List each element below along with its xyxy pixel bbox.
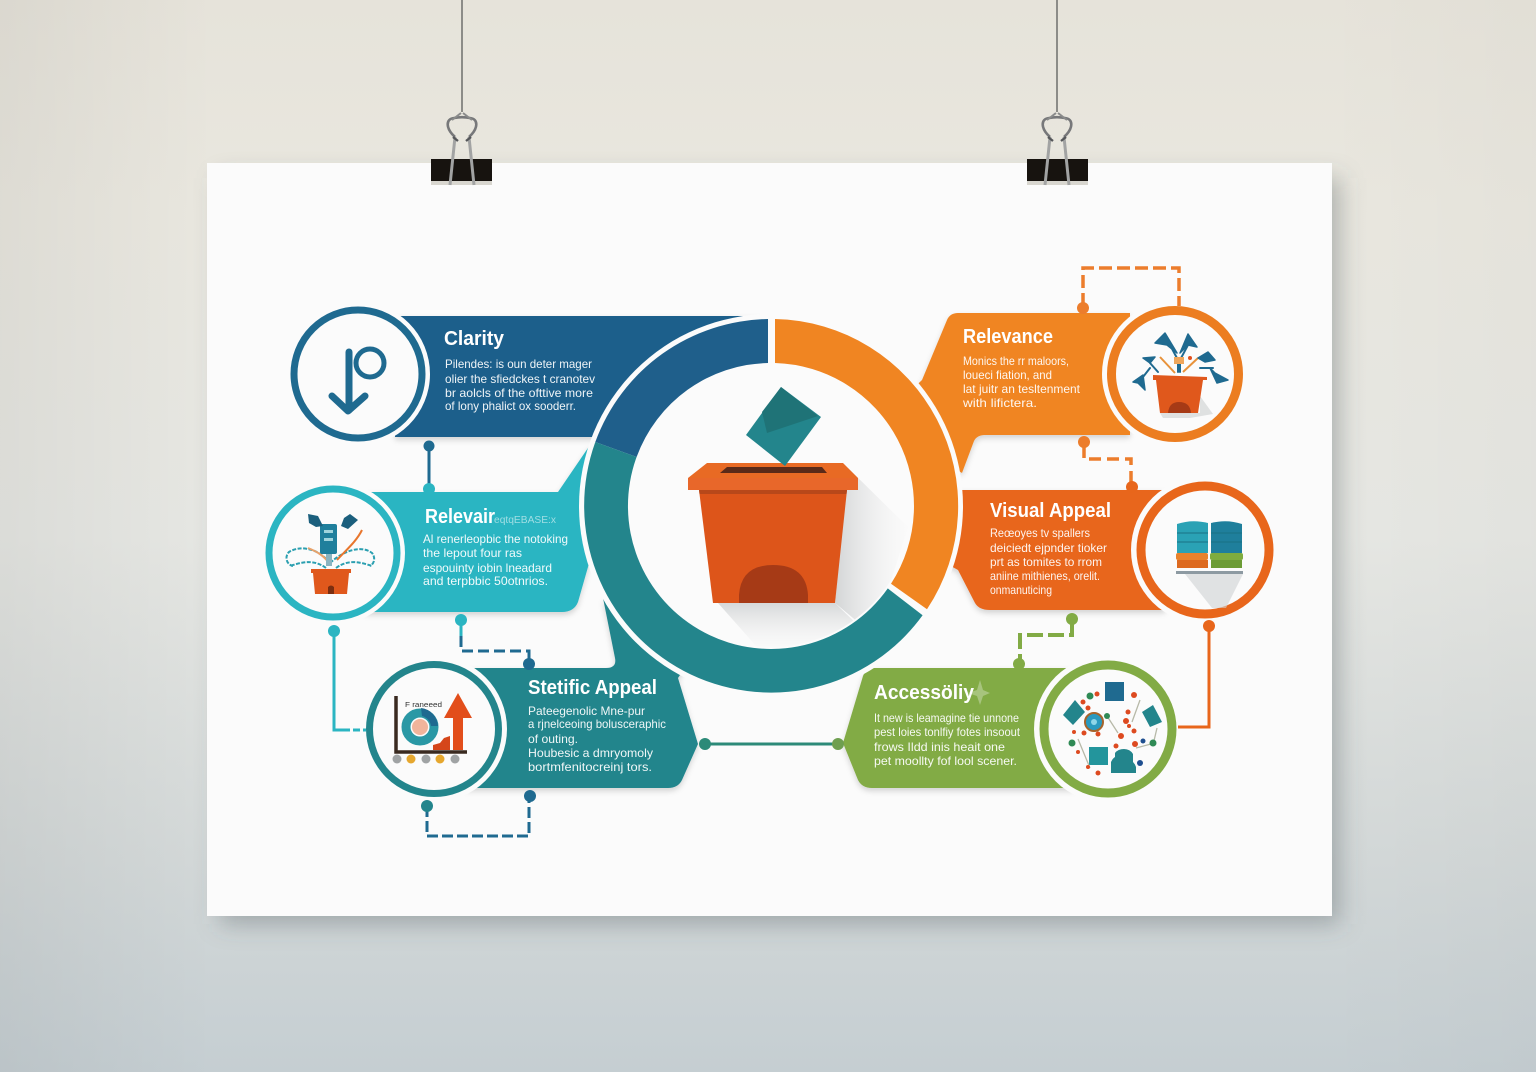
connector: relevance top dashed (1077, 268, 1179, 314)
ring segment: teal (584, 442, 923, 693)
clarity body text: of lony phalict ox sooderr. (445, 399, 576, 413)
relevance body text: lat juitr an tesltenment (963, 382, 1081, 396)
icon: arrow and ring (332, 349, 384, 411)
ballot paper (746, 387, 821, 466)
clarity body text (445, 357, 595, 413)
statistic badge (361, 656, 507, 802)
hanging clip left (431, 0, 492, 185)
panel: relevair (261, 445, 640, 625)
poster sheet (207, 163, 1332, 916)
statistic banner (465, 598, 698, 788)
accessibility body text: pest loies tonlfiy fotes insoout (874, 725, 1021, 739)
statistic body text: Houbesic a dmryomoly (528, 746, 653, 760)
icon: chart and arrow: F raneeed (405, 702, 442, 709)
connector: relevair to chart (328, 625, 366, 730)
visual appeal banner (940, 490, 1165, 610)
visual appeal badge (1131, 476, 1279, 624)
relevance body text: Monics the rr maloors, (963, 354, 1069, 368)
statistic body text: bortmfenitocreinj tors. (528, 760, 652, 774)
connector: visual to accessibility solid (1178, 620, 1215, 727)
donut ring (584, 319, 958, 693)
relevance body text: loueci fiation, and (963, 368, 1052, 382)
ring segment: blue (595, 319, 768, 457)
connector: chart bottom dashed loop (421, 790, 536, 836)
clarity body text: br aolcls of the ofttive more (445, 386, 593, 400)
central ballot box (688, 387, 882, 632)
relevair garbled subheading: eqtqEBASE:x (494, 515, 556, 526)
relevance heading: Relevance (963, 326, 1053, 348)
statistic body text (528, 704, 666, 774)
accessibility heading: Accessöliy (874, 682, 975, 704)
ring segment: orange (775, 319, 958, 609)
panel: clarity (286, 302, 760, 446)
connector: relevair to statistic dashed (455, 614, 535, 670)
clarity badge (286, 302, 430, 446)
box lid (688, 463, 858, 490)
icon: network of shapes (1063, 682, 1162, 776)
box long shadow right (835, 478, 882, 620)
accessibility body text (874, 711, 1021, 768)
connector: relevance to visual dashed (1078, 436, 1138, 493)
statistic body text: Pateegenolic Mne-pur (528, 704, 645, 718)
connector: statistic to accessibility (699, 738, 844, 750)
poster shadow (220, 178, 1340, 924)
visual appeal body text: deiciedt ejpnder tioker (990, 541, 1107, 555)
relevair body text (423, 532, 568, 588)
panel: statistic appeal (361, 598, 698, 802)
relevair body text: espouinty iobin lneadard (423, 561, 552, 575)
relevair body text: and terpbbic 50otnrios. (423, 574, 548, 588)
relevair body text: the lepout four ras (423, 546, 522, 560)
relevance body text (962, 354, 1081, 410)
relevance badge (1102, 301, 1248, 447)
clarity heading: Clarity (444, 328, 505, 350)
relevair banner (365, 445, 640, 612)
relevair body text: Al renerleopbic the notoking (423, 532, 568, 546)
box body (699, 490, 847, 603)
accessibility badge (1034, 655, 1182, 803)
visual appeal body text: onmanuticing (990, 583, 1052, 597)
visual appeal body text (990, 526, 1107, 597)
white gap around ring (579, 314, 963, 698)
panel: relevance (880, 301, 1248, 473)
statistic body text: a rjnelceoing bolusceraphic (528, 717, 666, 731)
relevair heading: Relevair (425, 506, 495, 528)
icon: plant in orange pot (1133, 333, 1228, 418)
connector: clarity to relevair (423, 440, 435, 495)
box slot (720, 467, 827, 473)
box long shadow below (718, 603, 853, 632)
relevance body text: with lifictera. (962, 396, 1037, 410)
relevance banner (880, 313, 1130, 473)
box door arch (739, 565, 808, 603)
accessibility body text: frows Ildd inis heait one (874, 740, 1005, 754)
accessibility body text: It new is leamagine tie unnone (874, 711, 1019, 725)
accessibility banner (843, 668, 1075, 788)
icon: plant in pot (286, 514, 374, 594)
panel: accessibility (843, 655, 1182, 803)
connector: accessibility to visual dashed (1013, 613, 1078, 670)
clarity body text: olier the sfiedckes t cranotev (445, 372, 595, 386)
icon: chart and arrow (392, 693, 472, 764)
hanging clip right (1027, 0, 1088, 185)
icon: stacked books (1176, 521, 1243, 608)
visual appeal body text: prt as tomites to rrom (990, 555, 1102, 569)
visual appeal body text: Reœoyes tv spallers (990, 526, 1090, 540)
panel: visual appeal (940, 476, 1279, 624)
clarity body text: Pilendes: is oun deter mager (445, 357, 592, 371)
accessibility heading glow (968, 680, 990, 705)
statistic heading: Stetific Appeal (528, 677, 657, 699)
accessibility body text: pet moollty fof lool scener. (874, 754, 1017, 768)
statistic body text: of outing. (528, 732, 578, 746)
visual appeal heading: Visual Appeal (990, 500, 1111, 522)
visual appeal body text: aniine mithienes, orelit. (990, 569, 1100, 583)
relevair badge (261, 481, 405, 625)
clarity banner (395, 316, 760, 437)
